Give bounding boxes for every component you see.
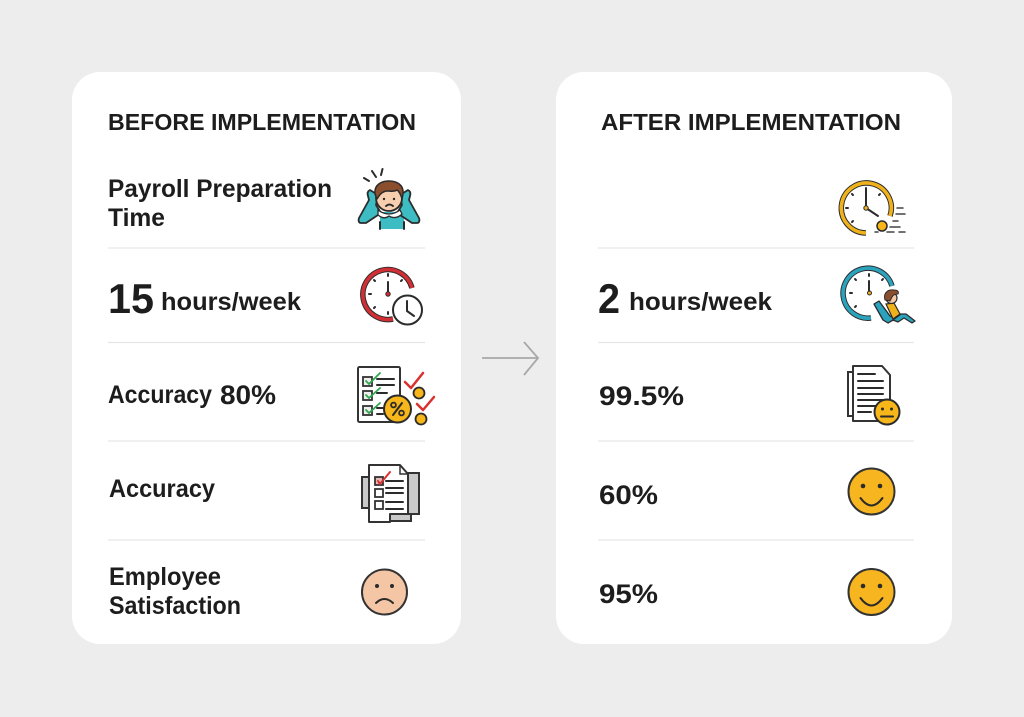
metric: 2 hours per week: 2 bbox=[598, 275, 620, 322]
icon: relaxed person with teal clock bbox=[843, 268, 915, 323]
text: accuracy 80%: Accuracy bbox=[108, 381, 212, 409]
metric: 15 hours per week bbox=[108, 275, 301, 322]
metric: 99.5%: 99.5% bbox=[599, 381, 684, 411]
text: accuracy 80%: 80% bbox=[220, 380, 276, 410]
text: accuracy: Accuracy bbox=[109, 475, 215, 503]
icon: checklist with percent bbox=[358, 367, 434, 424]
icon: document with neutral face bbox=[848, 366, 900, 424]
heading: after implementation: AFTER IMPLEMENTATION bbox=[601, 109, 901, 135]
panel: before implementation bbox=[72, 72, 461, 644]
text: employee satisfaction: Employee bbox=[109, 563, 221, 591]
heading: before implementation: BEFORE IMPLEMENTATION bbox=[108, 109, 416, 135]
icon: smiley face bbox=[848, 569, 894, 615]
icon: smiley face bbox=[848, 468, 894, 514]
metric: 15 hours per week: hours/week bbox=[161, 288, 301, 316]
metric: 15 hours per week: 15 bbox=[108, 275, 154, 322]
icon: stacked documents bbox=[362, 465, 419, 522]
text: employee satisfaction bbox=[109, 563, 241, 620]
text: employee satisfaction: Satisfaction bbox=[109, 592, 241, 620]
icon: stressed person bbox=[359, 169, 419, 229]
icon: fast yellow clock bbox=[841, 183, 905, 233]
metric: 2 hours per week bbox=[598, 275, 772, 322]
icon: sad face bbox=[362, 570, 407, 614]
text: payroll preparation time bbox=[108, 175, 332, 232]
metric: 95%: 95% bbox=[599, 579, 658, 609]
metric: 2 hours per week: hours/week bbox=[629, 288, 772, 316]
text: payroll preparation time: Time bbox=[108, 204, 165, 232]
panel: after implementation bbox=[556, 72, 952, 644]
arrow: before to after bbox=[482, 342, 538, 375]
icon: red clock bbox=[363, 270, 422, 324]
text: payroll preparation time: Payroll Preparation bbox=[108, 175, 332, 203]
text: accuracy 80% bbox=[108, 380, 276, 410]
metric: 60%: 60% bbox=[599, 480, 658, 510]
